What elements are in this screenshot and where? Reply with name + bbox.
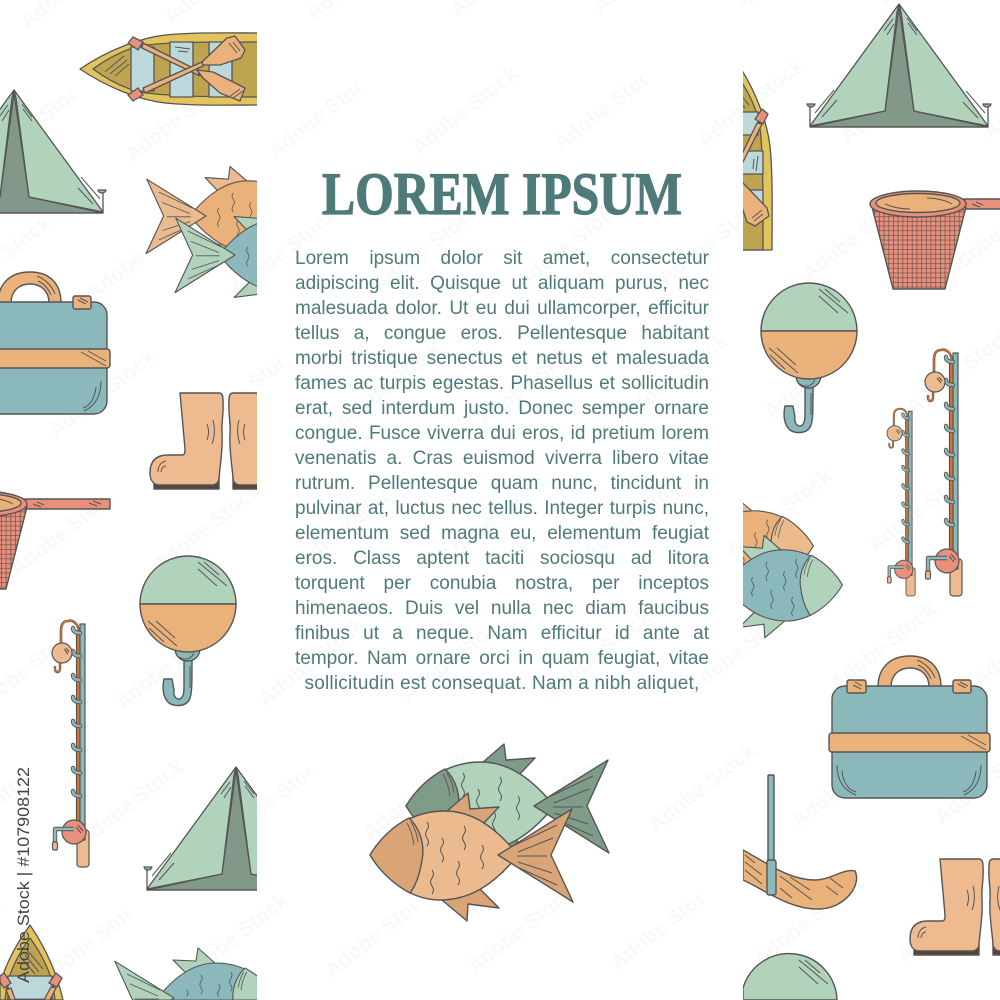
icon: paddle blade right	[743, 775, 857, 909]
icon: rowing boat right	[743, 70, 773, 251]
body text: elementum sed magna eu, elementum feugiat	[295, 523, 709, 544]
body text: morbi tristique senectus et netus et malesuada	[295, 348, 709, 369]
body text: torquent per conubia nostra, per inceptos	[295, 573, 709, 594]
icon: rubber boots left	[149, 392, 257, 490]
body text: finibus ut a neque. Nam efficitur id ante at	[295, 623, 709, 644]
icon: tackle bag left	[0, 272, 110, 414]
icon: float with hook left	[140, 556, 236, 706]
icon: rowing boat bottom left	[0, 925, 63, 1000]
body text: adipiscing elit. Quisque ut aliquam purus, nec	[295, 273, 709, 294]
body text: eros. Class aptent taciti sociosqu ad litora	[295, 548, 709, 569]
icon: landing net right	[870, 191, 1000, 289]
icon: float with hook right	[761, 283, 857, 433]
icon: tent top right	[807, 4, 991, 127]
icon: float bottom right	[743, 954, 837, 1000]
body text: congue. Fusce viverra dui eros, id pretium lorem	[295, 423, 709, 444]
body text: malesuada dolor. Ut eu dui ullamcorper, efficitur	[295, 298, 709, 319]
icon: rowing boat top left	[80, 33, 269, 105]
body text: tellus a, congue eros. Pellentesque habitant	[295, 323, 709, 344]
body text: Lorem ipsum dolor sit amet, consectetur	[295, 248, 709, 269]
body text: tempor. Nam ornare orci in quam feugiat, vitae	[295, 648, 709, 669]
icon: small fishing rod right	[887, 409, 915, 596]
stock image credit: Adobe Stock | #107908122	[14, 767, 33, 983]
body text: venenatis a. Cras euismod viverra libero vitae	[295, 448, 709, 469]
icon: fishing rod left	[52, 621, 89, 867]
body text: rutrum. Pellentesque quam nunc, tincidunt in	[295, 473, 709, 494]
icon: tent lower left	[143, 766, 257, 891]
body text: himenaeos. Duis vel nulla nec diam faucibus	[295, 598, 709, 619]
icon: orange and blue fish pair	[145, 166, 257, 298]
icon: large fishing rod right	[925, 350, 962, 596]
body text: pulvinar at, luctus nec tellus. Integer turpis nunc,	[295, 498, 709, 519]
illustration: two fish in the centre	[370, 744, 609, 921]
icon: tackle bag right	[829, 656, 990, 798]
icon: blue fish bottom left	[115, 948, 276, 1000]
title: LOREM IPSUM	[322, 161, 682, 227]
body text	[295, 248, 709, 694]
right column clipped icons	[743, 70, 858, 1000]
left column of fishing icons	[0, 32, 257, 1000]
icon: landing net left	[0, 491, 110, 589]
body text: fames ac turpis egestas. Phasellus et sollicitudin	[295, 373, 709, 394]
body text: sollicitudin est consequat. Nam a nibh aliquet,	[305, 673, 699, 694]
icon: rubber boots right	[910, 859, 1000, 955]
icon: tent left	[0, 90, 106, 213]
icon: fish pair right	[743, 502, 843, 638]
body text: erat, sed interdum justo. Donec semper ornare	[295, 398, 709, 419]
